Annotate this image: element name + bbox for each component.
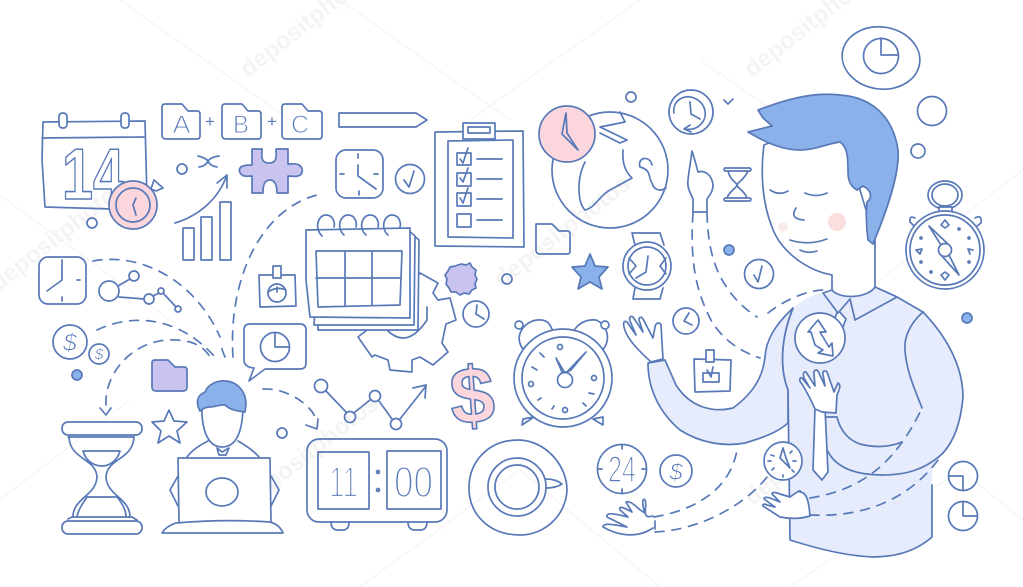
folders A + B + C: + [205, 112, 215, 131]
hair [748, 94, 898, 244]
icon: small clock [463, 301, 489, 327]
folders A + B + C: C [291, 111, 309, 139]
icon: dollar coin: $ [668, 459, 683, 486]
icon: rounded clock [336, 150, 383, 198]
icon: wall calendar showing 14 [42, 113, 147, 215]
icon: check circle [396, 164, 424, 194]
icon: pie chart quarter [948, 462, 978, 490]
small ring [502, 274, 512, 284]
icon: purple cog [445, 263, 477, 295]
icon: dollar coins: $ [94, 346, 104, 363]
text: depositphotos [489, 170, 636, 293]
icon: purple folder [152, 360, 187, 391]
dashed connector arcs [93, 195, 317, 415]
pink dollar sign: $ [447, 350, 497, 441]
icon: pencil [339, 113, 427, 127]
figure: man with closed eyes [624, 94, 963, 557]
icon: dollar coins: $ [62, 329, 78, 357]
icon: small clock [673, 308, 699, 334]
blue dot [724, 245, 734, 255]
armhole [905, 312, 923, 408]
facial features [770, 190, 827, 252]
blush [778, 213, 846, 232]
icon: wall calendar showing 14: 14 [62, 135, 124, 215]
24 hour circle [598, 444, 646, 494]
figure: person at laptop [162, 381, 283, 533]
icon: alarm clock [514, 320, 612, 427]
icon: digital clock 11:00: 11 [329, 458, 358, 507]
icon: square clock [39, 257, 86, 304]
icon: digital clock 11:00 [307, 439, 447, 530]
icon: dollar coins [53, 325, 109, 364]
icon: raised-palm bottom-left hand [603, 499, 653, 535]
icon: blue star [572, 254, 608, 289]
icon: pink stopwatch [109, 180, 163, 229]
icon: pie chart [948, 502, 978, 530]
lower hand [763, 491, 810, 518]
small ring [626, 92, 636, 102]
bent arm sleeve [822, 287, 963, 475]
dashed lines from raised hand [692, 213, 823, 358]
icon: clipboard checklist [435, 123, 524, 247]
icon: badge with tick [694, 350, 731, 392]
icon: node network [99, 271, 181, 312]
icon: hourglass [62, 422, 142, 534]
dashed lines from bottom-left hand [654, 450, 767, 532]
icon: folder [536, 224, 570, 254]
icon: pointing hand [688, 151, 713, 212]
blue dot [962, 313, 972, 323]
icon: globe with pink clock [539, 106, 668, 228]
icon: cup and saucer [469, 440, 567, 535]
small ring [87, 218, 97, 228]
neck and face [762, 130, 875, 298]
icon: clock with return arrow [669, 90, 713, 134]
text: depositphotos [739, 388, 886, 511]
icon: tick [724, 99, 733, 104]
blue dot [72, 370, 82, 380]
raised arm [648, 308, 793, 444]
icon: speech bubble with pie chart [244, 324, 306, 381]
icon: purple puzzle piece [239, 149, 302, 193]
icon: spiral desk calendar [306, 215, 419, 330]
icon: badge with pie [259, 266, 296, 307]
icon: line chart with arrow [314, 380, 426, 430]
small ring [277, 428, 287, 438]
clock on torso [764, 442, 802, 480]
folders A + B + C: A [172, 111, 191, 139]
raised hand [624, 316, 663, 362]
folders A + B + C [162, 104, 322, 139]
folders A + B + C: B [233, 111, 249, 139]
dashed arc with arrow to digital clock [263, 389, 318, 429]
icon: check circle [744, 260, 774, 288]
folders A + B + C: + [267, 112, 277, 131]
large ring [918, 96, 946, 126]
arrows badge [795, 313, 845, 363]
hand on chest [800, 370, 840, 413]
icon: cog behind calendar [358, 273, 456, 372]
icon: pie in oval [838, 22, 924, 94]
text: depositphotos [237, 390, 384, 513]
24 hour circle: 24 [608, 449, 636, 490]
dashed line lower torso [810, 453, 943, 515]
torso [783, 287, 963, 557]
tie [813, 310, 846, 480]
icon: compass stopwatch [906, 181, 984, 289]
dashed lines on torso [810, 408, 922, 498]
icon: digital clock 11:00: 00 [394, 458, 433, 507]
bar chart with rising arrow [175, 175, 231, 260]
icon: ring and squiggle [177, 156, 219, 174]
collar [823, 287, 897, 320]
icon: dollar coin [660, 455, 692, 487]
gear hole [387, 307, 427, 338]
small ring [911, 144, 925, 158]
icon: small hourglass [724, 168, 751, 201]
icon: outline star [152, 410, 187, 443]
icon: wrist watch [623, 233, 671, 299]
